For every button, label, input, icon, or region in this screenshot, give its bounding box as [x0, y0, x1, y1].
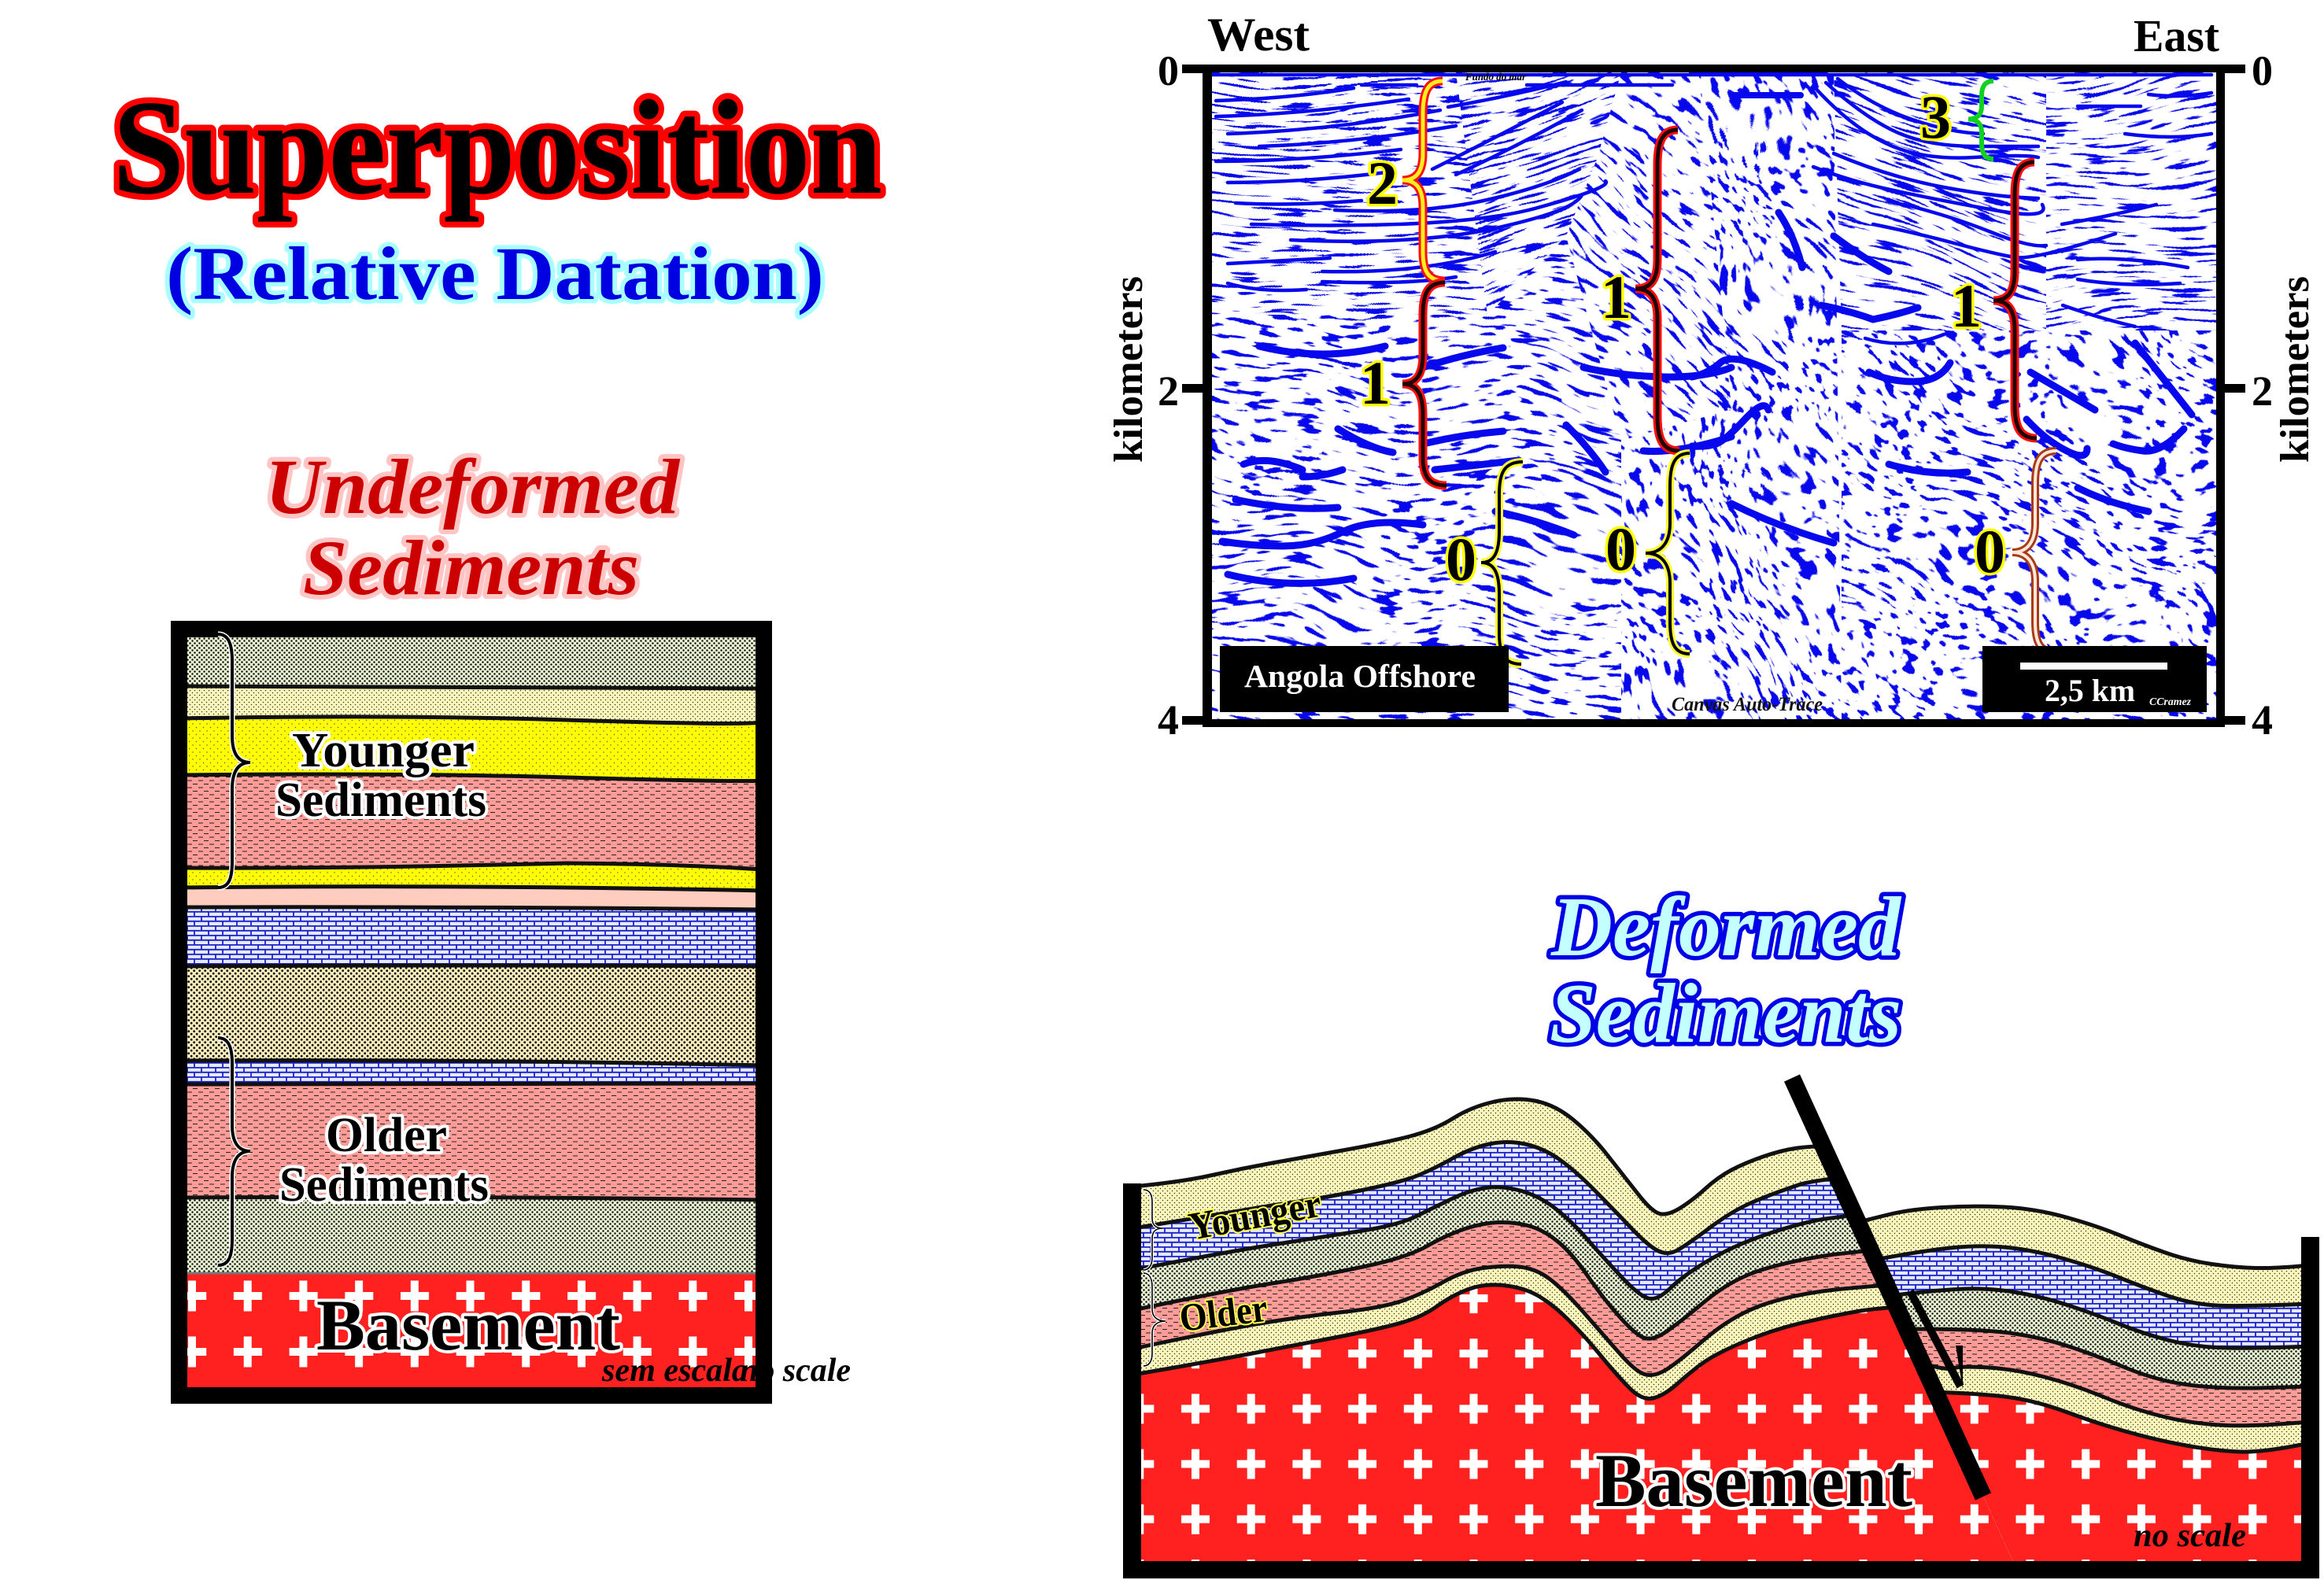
unit numbers: 3	[1920, 83, 1951, 151]
label: no scale: no scale	[2134, 1518, 2246, 1554]
heading: undeformed sediments	[265, 443, 681, 611]
unit numbers: 1	[1601, 263, 1631, 331]
frame: right wall	[2301, 1237, 2319, 1578]
label: basement: Basement	[1595, 1438, 1912, 1523]
main reflectors thin	[1212, 75, 2211, 343]
scale bar box	[1982, 646, 2207, 712]
caption: fundo do mar: Fundo do mar	[1465, 72, 1527, 83]
axis: top and bottom	[1203, 65, 2225, 727]
brace: unit 0 middle	[1646, 453, 1690, 654]
title: Superposition	[113, 73, 882, 223]
fault	[1792, 1078, 1983, 1497]
seismic reflector texture	[1212, 72, 2216, 719]
label: younger sediments: Younger	[292, 724, 475, 777]
brace: unit 0 east	[2012, 451, 2056, 652]
hanging wall folded layers	[1865, 1204, 2301, 1561]
scale bar box: CCramez	[2149, 696, 2192, 708]
upper seafloor thick line	[1692, 72, 1824, 95]
unit numbers: 1	[1951, 271, 1982, 340]
scale bar box: 2,5 km	[2045, 673, 2135, 708]
heading: undeformed sediments: Sediments	[303, 524, 639, 611]
label: younger sediments	[275, 724, 486, 827]
heading: deformed sediments	[1550, 880, 1902, 1061]
label: scale note: sem escala	[601, 1353, 748, 1389]
tick labels right: 2	[2252, 367, 2273, 415]
tick labels right	[2252, 47, 2273, 744]
panel: undeformed section	[179, 629, 851, 1397]
unit numbers: 0	[1975, 517, 2005, 585]
brace: older	[1144, 1273, 1166, 1366]
unit numbers: 2	[1367, 149, 1398, 217]
tick labels left: 4	[1158, 696, 1179, 744]
brace: unit 3	[1968, 81, 1993, 159]
unit numbers: 0	[1605, 515, 1636, 583]
brace: unit 1 east	[1993, 162, 2037, 438]
frame	[179, 629, 763, 1396]
axis label right: kilometers	[2273, 276, 2318, 463]
label: older: Older	[1177, 1286, 1270, 1340]
panel: seismic line	[1114, 19, 2309, 734]
tick labels right: 4	[2252, 696, 2273, 744]
unit numbers: 0	[1446, 525, 1476, 593]
arrow: fault displacement	[1910, 1291, 1963, 1390]
label: scale note	[601, 1353, 851, 1389]
footwall folded layers	[1141, 1097, 2013, 1561]
frame: floor	[1123, 1561, 2319, 1578]
caption: canvas auto-trace: Canvas Auto-Trace	[1672, 694, 1823, 715]
unit numbers	[1360, 83, 2005, 593]
subtitle: (Relative Datation)	[166, 231, 824, 316]
tick labels left: 0	[1158, 47, 1179, 94]
label: scale note: no scale	[740, 1353, 851, 1389]
brace: younger	[218, 634, 250, 888]
panel: deformed section	[1123, 1078, 2319, 1578]
label box: angola offshore	[1220, 646, 1509, 712]
horizontal sediment layers	[181, 633, 763, 1397]
axis: right	[2216, 65, 2245, 727]
brace: unit 0 west	[1481, 462, 1523, 664]
heading: east: East	[2134, 10, 2220, 61]
label: older sediments: Sediments	[279, 1158, 489, 1212]
brace: younger	[1144, 1190, 1162, 1270]
brace: unit 2	[1402, 81, 1445, 281]
label: basement: Basement	[316, 1285, 620, 1365]
axis: left	[1182, 65, 1212, 727]
label: younger: Younger	[1185, 1181, 1325, 1249]
heading: west: West	[1207, 9, 1310, 61]
unit numbers: 1	[1360, 349, 1391, 417]
brace: unit 1 west	[1402, 282, 1446, 485]
heading: deformed sediments: Deformed	[1550, 880, 1902, 974]
label: older sediments: Older	[326, 1109, 447, 1162]
main reflectors thick	[1222, 212, 2192, 583]
axis label left: kilometers	[1107, 276, 1151, 463]
label box: angola offshore: Angola Offshore	[1244, 658, 1476, 694]
tick labels right: 0	[2252, 47, 2273, 94]
label: older sediments	[279, 1109, 489, 1212]
brace: unit 1 middle	[1635, 130, 1679, 451]
heading: undeformed sediments: Undeformed	[265, 443, 681, 530]
tick labels left	[1158, 47, 1179, 744]
frame: left wall	[1123, 1183, 1141, 1578]
heading: deformed sediments: Sediments	[1550, 967, 1901, 1061]
label: younger sediments: Sediments	[275, 773, 486, 827]
tick labels left: 2	[1158, 367, 1179, 415]
brace: older	[218, 1038, 250, 1265]
